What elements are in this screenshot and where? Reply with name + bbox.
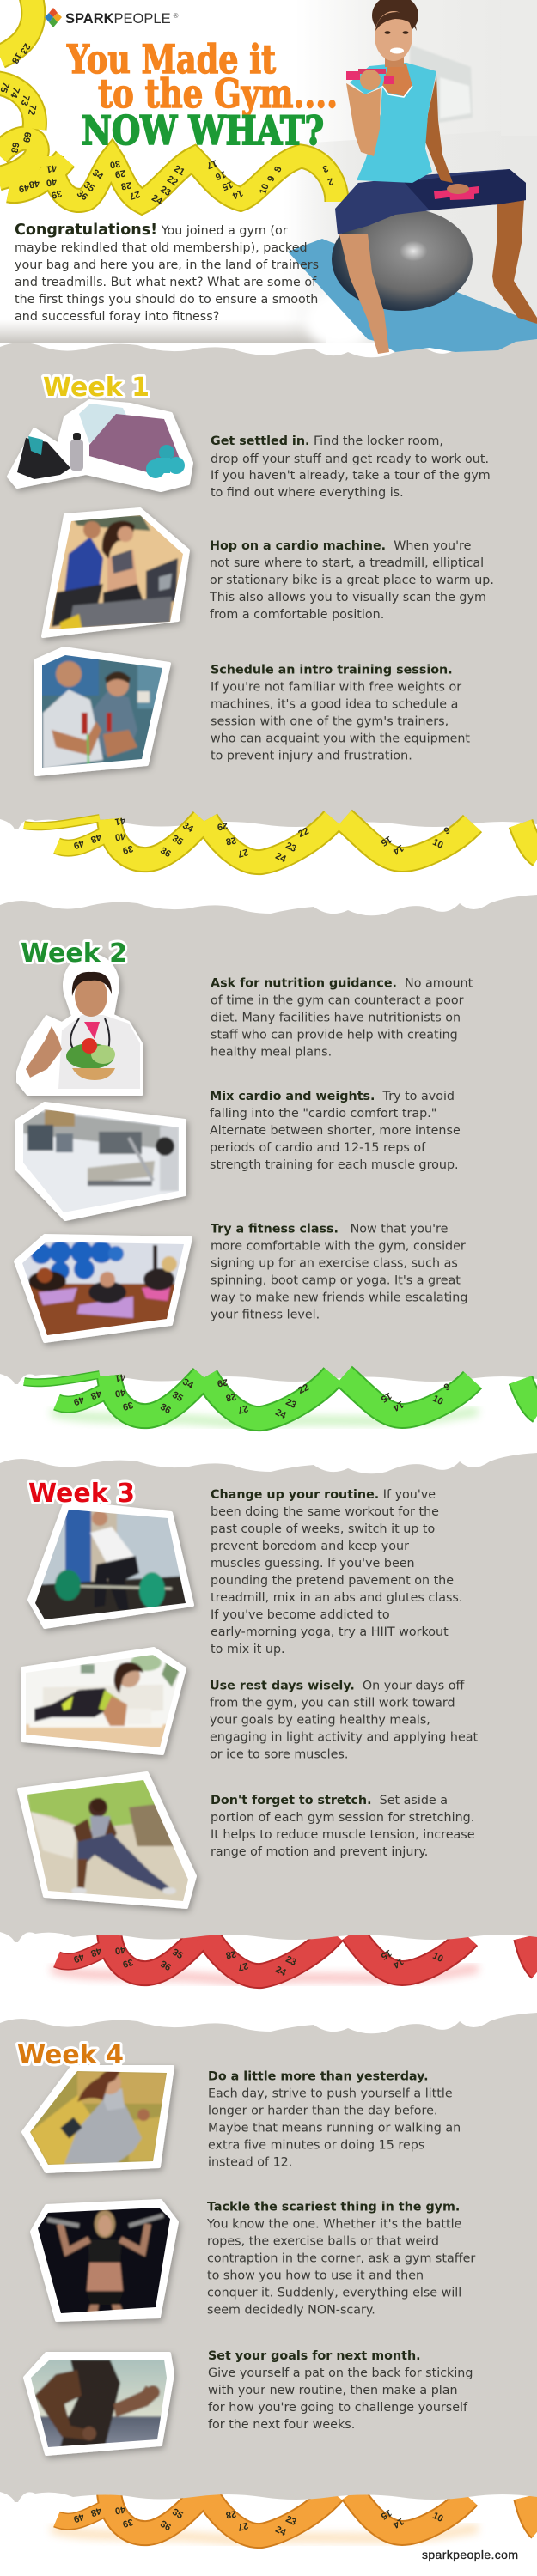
tape numbers: header: 27 (128, 189, 141, 201)
logo: SparkPeople: ® (174, 12, 179, 20)
measuring tape: orange: 40 (114, 2504, 126, 2516)
measuring tape: green: 9 (442, 1382, 452, 1394)
text: schedule an intro training session: session with one of the gym's trainers, (211, 714, 449, 728)
tape numbers: header: 74 (8, 86, 21, 100)
legs (339, 234, 389, 354)
measuring tape: yellow: 39 (121, 843, 134, 855)
measuring tape: yellow: 10 (430, 837, 445, 851)
intro text (15, 222, 319, 324)
tape numbers: header: 23 (158, 185, 173, 198)
text: try a fitness class: way to make new friends while escalating (211, 1291, 467, 1305)
text: hop on a cardio machine: or stationary bike is a great place to warm up. (210, 574, 494, 587)
measuring tape: red: 49 (72, 1951, 85, 1965)
measuring tape: yellow: 49 (72, 837, 85, 851)
text: do a little more than yesterday: Each day, strive to push yourself a little (208, 2087, 453, 2100)
tape numbers: header: 39 (50, 188, 63, 200)
heading: week 1: Week 1 (43, 373, 150, 403)
panel: week 3 background (0, 1453, 537, 1942)
measuring tape: yellow: 28 (225, 835, 237, 847)
tape numbers: header: 24 (150, 193, 165, 208)
text: don't forget to stretch: It helps to reduce muscle tension, increase (211, 1828, 475, 1842)
tape numbers: header: 34 (90, 167, 106, 183)
measuring tape: red: 24 (273, 1965, 288, 1978)
pink dumbbell lower (434, 186, 479, 199)
text: schedule an intro training session: who can acquaint you with the equipment (211, 732, 470, 745)
text: don't forget to stretch: range of motion and prevent injury. (211, 1845, 428, 1859)
text: hop on a cardio machine: from a comfortable position. (210, 608, 384, 622)
measuring tape: orange (52, 2493, 537, 2540)
panel: header (0, 0, 537, 349)
text: tackle the scariest thing: contraption in the corner, ask a gym staffer (207, 2251, 475, 2265)
measuring tape: green: 34 (180, 1377, 196, 1392)
text: get settled in: Get settled in. Find the locker room, (211, 434, 443, 448)
measuring tape: yellow: 40 (114, 830, 126, 842)
text: hop on a cardio machine: not sure where to start, a treadmill, elliptical (210, 556, 484, 570)
pink dumbbell upper (346, 71, 360, 80)
photo: autumn runner (23, 2065, 173, 2172)
photo: outdoor stretch (19, 1773, 195, 1907)
text: mix cardio and weights: Mix cardio and weights. Try to avoid (210, 1090, 455, 1103)
measuring tape: green: 29 (217, 1376, 229, 1388)
tape numbers: header: 23 (18, 41, 32, 56)
heading: week 2: Week 2 (21, 939, 127, 969)
measuring tape: red (52, 1933, 537, 1980)
text: do a little more than yesterday: instead of 12. (208, 2155, 292, 2169)
measuring tape: green: 49 (72, 1394, 85, 1407)
tape numbers: header (0, 41, 335, 208)
text: use rest days wisely: engaging in light activity and applying heat (210, 1731, 479, 1745)
text: set your goals: Give yourself a pat on the back for sticking (208, 2366, 473, 2380)
text: try a fitness class: more comfortable with the gym, consider (211, 1240, 466, 1254)
text: ask for nutrition guidance: Ask for nutrition guidance. No amount (211, 977, 473, 991)
measuring tape: orange: 36 (158, 2519, 173, 2533)
woman with exercise ball (288, 0, 537, 354)
measuring tape: yellow: 23 (284, 841, 298, 854)
measuring tape: green: 39 (121, 1400, 134, 1412)
photo: nutritionist (17, 954, 142, 1095)
measuring tape: orange: 23 (284, 2514, 298, 2528)
tape numbers: header: 18 (9, 51, 23, 65)
measuring tape: red: 48 (89, 1945, 102, 1959)
tape numbers: header: 28 (120, 179, 132, 191)
gym room background (0, 0, 537, 343)
text: tackle the scariest thing: Tackle the scariest thing in the gym. (207, 2200, 460, 2214)
text: ask for nutrition guidance: staff who can provide help with creating (211, 1029, 458, 1042)
text: use rest days wisely: your goals by eating healthy meals, (210, 1714, 430, 1728)
measuring tape: green: 36 (158, 1402, 173, 1416)
measuring tape: yellow: 9 (442, 825, 452, 837)
text: tackle the scariest thing: ropes, the exercise balls or that weird (207, 2234, 439, 2248)
heading: week 3: Week 3 (28, 1479, 135, 1509)
text: set your goals: for how you're going to challenge yourself (208, 2401, 468, 2415)
measuring tape: orange: 49 (72, 2511, 85, 2524)
tape numbers: header: 22 (165, 174, 180, 188)
left arm (425, 76, 453, 183)
text: mix cardio and weights: Alternate between shorter, more intense (210, 1124, 461, 1138)
text: mix cardio and weights: falling into the "cardio comfort trap." (210, 1107, 436, 1121)
tape numbers: header: 36 (75, 188, 89, 203)
text: get settled in: drop off your stuff and get ready to work out. (211, 453, 489, 466)
text: hop on a cardio machine: This also allows you to visually scan the gym (209, 591, 486, 605)
week 2 (15, 939, 473, 1341)
tape numbers: header: 73 (19, 94, 31, 106)
text: tackle the scariest thing: conquer it. Suddenly, everything else will (207, 2286, 461, 2300)
measuring tape: yellow: 22 (296, 826, 311, 840)
text: try a fitness class: Try a fitness class. Now that you're (211, 1223, 449, 1236)
text: change up your routine: early-morning yoga, try a HIIT workout (211, 1625, 449, 1639)
week 3 (19, 1479, 479, 1907)
exercise ball (332, 208, 473, 311)
panel: week 1 background (0, 337, 537, 829)
measuring tape: yellow: 15 (379, 834, 394, 848)
photo: treadmill runners (43, 509, 189, 636)
text: do a little more than yesterday: extra five minutes or doing 15 reps (208, 2138, 424, 2152)
measuring tape: green: 41 (114, 1371, 126, 1383)
measuring tape: yellow: 14 (390, 842, 406, 857)
tape numbers: header: 68 (9, 142, 21, 154)
measuring tape: green: 14 (390, 1399, 406, 1413)
measuring tape: green: 23 (284, 1397, 298, 1411)
text: schedule an intro training session: If you're not familiar with free weights or (211, 680, 461, 694)
measuring tape: orange: 10 (430, 2511, 445, 2524)
text: use rest days wisely: or ice to sore muscles. (210, 1748, 348, 1762)
title: to the Gym.... (98, 70, 338, 117)
text: change up your routine: prevent boredom and keep your (211, 1540, 409, 1553)
measuring tape: green (24, 1371, 537, 1423)
gray fade under header (0, 319, 326, 343)
text: set your goals: Set your goals for next month. (208, 2349, 421, 2363)
measuring tape: yellow (24, 815, 537, 865)
measuring tape: yellow: 48 (89, 831, 102, 845)
text: get settled in: If you haven't already, take a tour of the gym (211, 469, 491, 483)
text: don't forget to stretch: portion of each gym session for stretching. (211, 1811, 474, 1825)
measuring tape: green: 40 (114, 1387, 126, 1399)
measuring tape: red: 36 (158, 1959, 173, 1973)
measuring tape: green: 48 (89, 1388, 102, 1401)
measuring tape: yellow: 34 (180, 821, 196, 835)
measuring tape: green: 15 (379, 1390, 394, 1404)
photo: deadlift (29, 1502, 192, 1627)
measuring tape: red: 27 (236, 1960, 249, 1972)
text: ask for nutrition guidance: healthy meal plans. (211, 1046, 332, 1060)
text: set your goals (208, 2349, 473, 2432)
exercise mat (288, 239, 537, 352)
tape numbers: header: 2 (326, 175, 335, 187)
text: hop on a cardio machine (209, 539, 494, 622)
measuring tape: red: 28 (225, 1948, 237, 1960)
logo: SparkPeople (45, 8, 179, 27)
measuring tape: orange: 14 (390, 2516, 406, 2530)
text: change up your routine: pounding the pretend pavement on the (211, 1574, 454, 1588)
measuring tape: red: 40 (114, 1944, 126, 1956)
measuring tape: red: 39 (121, 1957, 134, 1969)
text: schedule an intro training session (211, 663, 470, 762)
footer: site name: sparkpeople.com (422, 2548, 518, 2561)
text: get settled in (211, 434, 491, 500)
title: NOW WHAT? (82, 107, 324, 154)
tape numbers: header: 40 (46, 176, 58, 188)
text: use rest days wisely (210, 1680, 479, 1762)
text: try a fitness class: signing up for an exercise class, such as (211, 1257, 458, 1271)
text: get settled in: to find out where everything is. (211, 486, 404, 500)
intro text: Congratulations! You joined a gym (or (15, 222, 288, 239)
panel: week 4 background (0, 2013, 537, 2502)
photo: gym equipment (17, 1103, 185, 1219)
measuring tape: green: 35 (170, 1390, 185, 1404)
right arm (346, 83, 381, 156)
panel: week 2 background (0, 895, 537, 1384)
text: do a little more than yesterday (208, 2069, 461, 2169)
tape numbers: header: 41 (46, 162, 58, 174)
measuring tape: red: 35 (170, 1947, 185, 1961)
measuring tape: yellow: 29 (217, 820, 229, 832)
photo: weights (32, 2201, 177, 2320)
measuring tape: header (0, 0, 337, 202)
week 4 (17, 2040, 475, 2454)
measuring tape: green: 27 (236, 1403, 249, 1415)
tape numbers: header: 49 (18, 182, 30, 194)
photo: gym gear (9, 401, 192, 490)
chest (382, 62, 412, 96)
measuring tape: orange: 48 (89, 2505, 102, 2518)
text: change up your routine (211, 1488, 462, 1656)
tape numbers: header: 21 (172, 164, 186, 178)
tape numbers: header: 69 (21, 131, 33, 143)
text: use rest days wisely: Use rest days wisely. On your days off (210, 1680, 465, 1693)
measuring tape: red: 15 (379, 1947, 394, 1961)
text: change up your routine: If you've become addicted to (211, 1608, 390, 1622)
text: ask for nutrition guidance: diet. Many facilities have nutritionists on (211, 1012, 461, 1025)
text: set your goals: for the next four weeks. (208, 2418, 355, 2432)
photo: runner by the sea (25, 2354, 173, 2454)
photo: plank (22, 1649, 186, 1756)
logo: SparkPeople: SPARKPEOPLE (65, 11, 171, 27)
text: change up your routine: been doing the same workout for the (211, 1505, 439, 1519)
white cloud behind mat (305, 290, 374, 349)
tape numbers: header: 16 (214, 168, 227, 182)
tape numbers: header: 17 (205, 157, 218, 171)
intro text: maybe rekindled that old membership), packed (15, 241, 308, 255)
tape numbers: header: 9 (265, 174, 278, 183)
text: tackle the scariest thing (206, 2200, 475, 2317)
text: change up your routine: to mix it up. (211, 1643, 285, 1656)
week 1 (9, 373, 494, 775)
text: do a little more than yesterday: longer or harder than the day before. (208, 2104, 437, 2117)
intro text: and successful foray into fitness? (15, 310, 219, 324)
measuring tape: yellow: 27 (236, 847, 249, 859)
measuring tape: orange: 28 (225, 2508, 237, 2520)
measuring tape: yellow: 24 (273, 851, 288, 865)
tape numbers: header: 48 (28, 178, 40, 190)
measuring tape: red: 23 (284, 1954, 298, 1968)
photo: fitness class (15, 1236, 191, 1341)
text: schedule an intro training session: machines, it's a good idea to schedule a (211, 697, 458, 711)
measuring tape: green: 22 (296, 1382, 311, 1396)
text: tackle the scariest thing: to show you how to use it and then (207, 2269, 424, 2282)
tape numbers: header: 8 (272, 165, 284, 173)
tape numbers: header: 15 (221, 179, 234, 192)
text: tackle the scariest thing: seem decidedly NON-scary. (207, 2303, 375, 2317)
intro text: the first things you should do to ensure a smooth (15, 293, 318, 307)
text: mix cardio and weights (210, 1090, 461, 1172)
text: schedule an intro training session: to prevent injury and frustration. (211, 749, 412, 762)
title (66, 36, 338, 154)
tape numbers: header: 14 (230, 187, 244, 201)
text: do a little more than yesterday: Maybe that means running or walking an (208, 2121, 461, 2135)
text: tackle the scariest thing: You know the one. Whether it's the battle (206, 2217, 462, 2231)
measuring tape: green: 24 (273, 1407, 288, 1421)
measuring tape: orange: 15 (379, 2507, 394, 2521)
text: hop on a cardio machine: Hop on a cardio machine. When you're (210, 539, 472, 553)
intro text: and treadmills. But what next? What are some of (15, 276, 317, 289)
text: change up your routine: treadmill, mix in an abs and glutes class. (211, 1591, 462, 1605)
text: ask for nutrition guidance (211, 977, 473, 1060)
text: change up your routine: Change up your routine. If you've (211, 1488, 436, 1502)
measuring tape: orange: 39 (121, 2517, 134, 2529)
measuring tape: orange: 24 (273, 2524, 288, 2538)
tape numbers: header: 72 (26, 104, 38, 116)
measuring tape: yellow: 36 (158, 846, 173, 860)
text: don't forget to stretch (211, 1794, 475, 1859)
measuring tape: yellow: 35 (170, 834, 185, 848)
text: change up your routine: muscles guessing. If you've been (211, 1557, 415, 1571)
text: don't forget to stretch: Don't forget to stretch. Set aside a (211, 1794, 448, 1807)
text: schedule an intro training session: Schedule an intro training session. (211, 663, 453, 677)
text: use rest days wisely: from the gym, you can still work toward (210, 1697, 455, 1710)
measuring tape: red: 14 (390, 1956, 406, 1971)
text: mix cardio and weights: strength training for each muscle group. (210, 1158, 459, 1172)
measuring tape: green: 10 (430, 1394, 445, 1407)
intro text: your bag and here you are, in the land of trainers (15, 258, 319, 272)
measuring tape: red: 10 (430, 1951, 445, 1965)
head and hair (372, 0, 418, 36)
text: set your goals: with your new routine, then make a plan (208, 2384, 458, 2397)
text: mix cardio and weights: periods of cardio and 12-15 reps of (210, 1141, 426, 1155)
top (350, 63, 436, 183)
measuring tape: yellow: 41 (114, 815, 126, 827)
text: change up your routine: past couple of weeks, switch it up to (211, 1522, 435, 1536)
tape numbers: header: 29 (114, 167, 126, 179)
text: try a fitness class (211, 1223, 467, 1322)
text: try a fitness class: your fitness level. (211, 1309, 320, 1322)
measuring tape: orange: 35 (170, 2507, 185, 2521)
measuring tape: green: 28 (225, 1391, 237, 1403)
title: You Made it (66, 36, 277, 82)
heading: week 4: Week 4 (17, 2040, 124, 2070)
leggings (335, 169, 526, 234)
tape numbers: header: 35 (82, 179, 96, 194)
measuring tape: orange: 27 (236, 2520, 249, 2532)
text: try a fitness class: spinning, boot camp or yoga. It's a great (211, 1274, 461, 1288)
tape numbers: header: 10 (258, 183, 272, 196)
tape numbers: header: 30 (109, 158, 121, 170)
tape numbers: header: 3 (321, 162, 330, 174)
text: do a little more than yesterday: Do a little more than yesterday. (208, 2069, 429, 2083)
text: ask for nutrition guidance: of time in the gym can counteract a poor (211, 994, 464, 1008)
photo: trainer session (36, 648, 169, 775)
